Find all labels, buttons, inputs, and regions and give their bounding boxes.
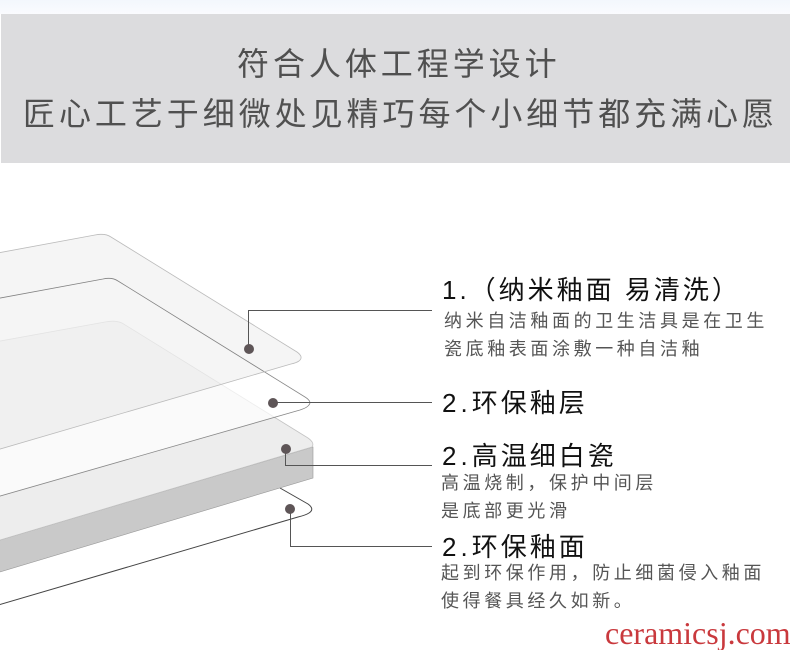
text block 4	[441, 532, 765, 611]
text block 4: 起到环保作用，防止细菌侵入釉面	[441, 563, 765, 583]
text block 4: 2.环保釉面	[442, 532, 588, 562]
text block 3: 2.高温细白瓷	[442, 441, 617, 471]
callout 1 leader	[244, 310, 432, 354]
text block 1: 纳米自洁釉面的卫生洁具是在卫生	[444, 311, 768, 331]
text block 1	[442, 275, 768, 359]
text block 3: 是底部更光滑	[441, 501, 571, 521]
ceramic layer side	[0, 447, 313, 574]
header banner	[1, 14, 790, 163]
text block 3	[441, 441, 657, 521]
callout 4 leader	[285, 504, 432, 546]
top nano glaze layer	[0, 234, 301, 450]
text block 1: 瓷底釉表面涂敷一种自洁釉	[444, 339, 703, 359]
text block 3: 高温烧制，保护中间层	[441, 473, 657, 493]
bottom plate outline	[0, 488, 312, 606]
text block 4: 使得餐具经久如新。	[441, 591, 635, 611]
title line 2: 匠心工艺于细微处见精巧每个小细节都充满心愿	[23, 96, 778, 132]
text block 2: 2.环保釉层	[442, 388, 588, 418]
callout 3 leader	[281, 444, 432, 466]
top background strip	[0, 0, 790, 14]
text block 1: 1.（纳米釉面 易清洗）	[442, 275, 741, 305]
layered plate diagram	[0, 234, 313, 606]
ceramic layer top	[0, 321, 313, 542]
callout 2 leader	[268, 398, 432, 408]
title line 1: 符合人体工程学设计	[237, 46, 561, 82]
middle glaze layer	[0, 278, 310, 498]
